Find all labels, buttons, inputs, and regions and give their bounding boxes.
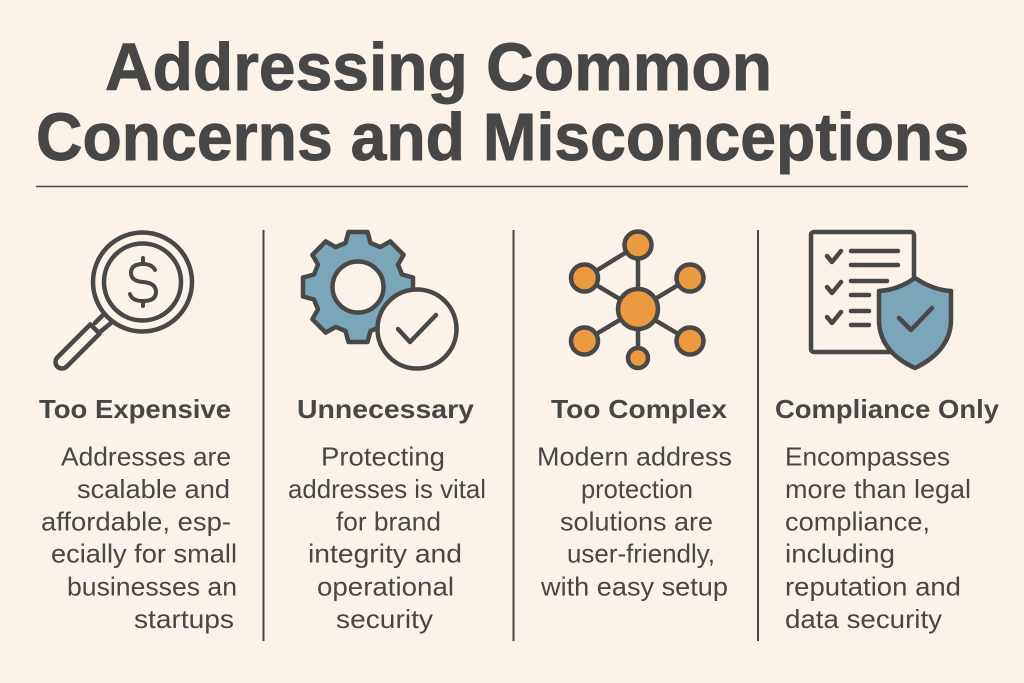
panel: unnecessary: [288, 232, 486, 634]
text: too expensive body: [41, 442, 237, 634]
text: too expensive body: businesses an: [67, 572, 237, 602]
icon: gear with check: [303, 232, 456, 368]
panel: compliance only: [775, 232, 1000, 634]
text: unnecessary body: integrity and: [308, 538, 462, 568]
panel: too expensive: [39, 232, 237, 634]
text: too complex body: user-friendly,: [567, 538, 715, 568]
heading: too expensive: Too Expensive: [39, 394, 231, 424]
icon: checklist with shield: [811, 232, 951, 368]
text: compliance only body: data security: [785, 604, 942, 634]
text: compliance only body: Encompasses: [785, 442, 950, 472]
text: too complex body: solutions are: [560, 506, 713, 536]
text: unnecessary body: security: [336, 604, 433, 634]
panel: too complex: [537, 232, 732, 602]
text: too expensive body: startups: [134, 604, 234, 634]
heading: too complex: Too Complex: [551, 394, 728, 424]
icon: network of nodes: [571, 232, 704, 368]
text: unnecessary body: Protecting: [321, 442, 445, 472]
title: Addressing Common: [105, 30, 772, 105]
text: unnecessary body: for brand: [336, 506, 441, 536]
text: compliance only body: including: [785, 538, 895, 568]
text: unnecessary body: addresses is vital: [288, 474, 486, 504]
text: compliance only body: more than legal: [785, 474, 971, 504]
text: too expensive body: Addresses are: [61, 442, 231, 472]
text: too complex body: protection: [581, 474, 693, 504]
text: too complex body: with easy setup: [540, 572, 728, 602]
text: compliance only body: reputation and: [785, 572, 961, 602]
text: too complex body: Modern address: [537, 442, 732, 472]
text: too expensive body: scalable and: [77, 474, 230, 504]
icon: magnifying glass with dollar: [55, 232, 192, 369]
text: too expensive body: ecially for small: [51, 538, 237, 568]
text: unnecessary body: operational: [317, 572, 454, 602]
heading: unnecessary: Unnecessary: [297, 394, 475, 424]
title: Concerns and Misconceptions: [36, 100, 969, 175]
text: compliance only body: [785, 442, 971, 634]
text: too expensive body: affordable, esp-: [41, 506, 231, 536]
text: unnecessary body: [288, 442, 486, 634]
text: too complex body: [537, 442, 732, 602]
heading: compliance only: Compliance Only: [775, 394, 1000, 424]
title: [36, 30, 969, 175]
text: compliance only body: compliance,: [785, 506, 930, 536]
